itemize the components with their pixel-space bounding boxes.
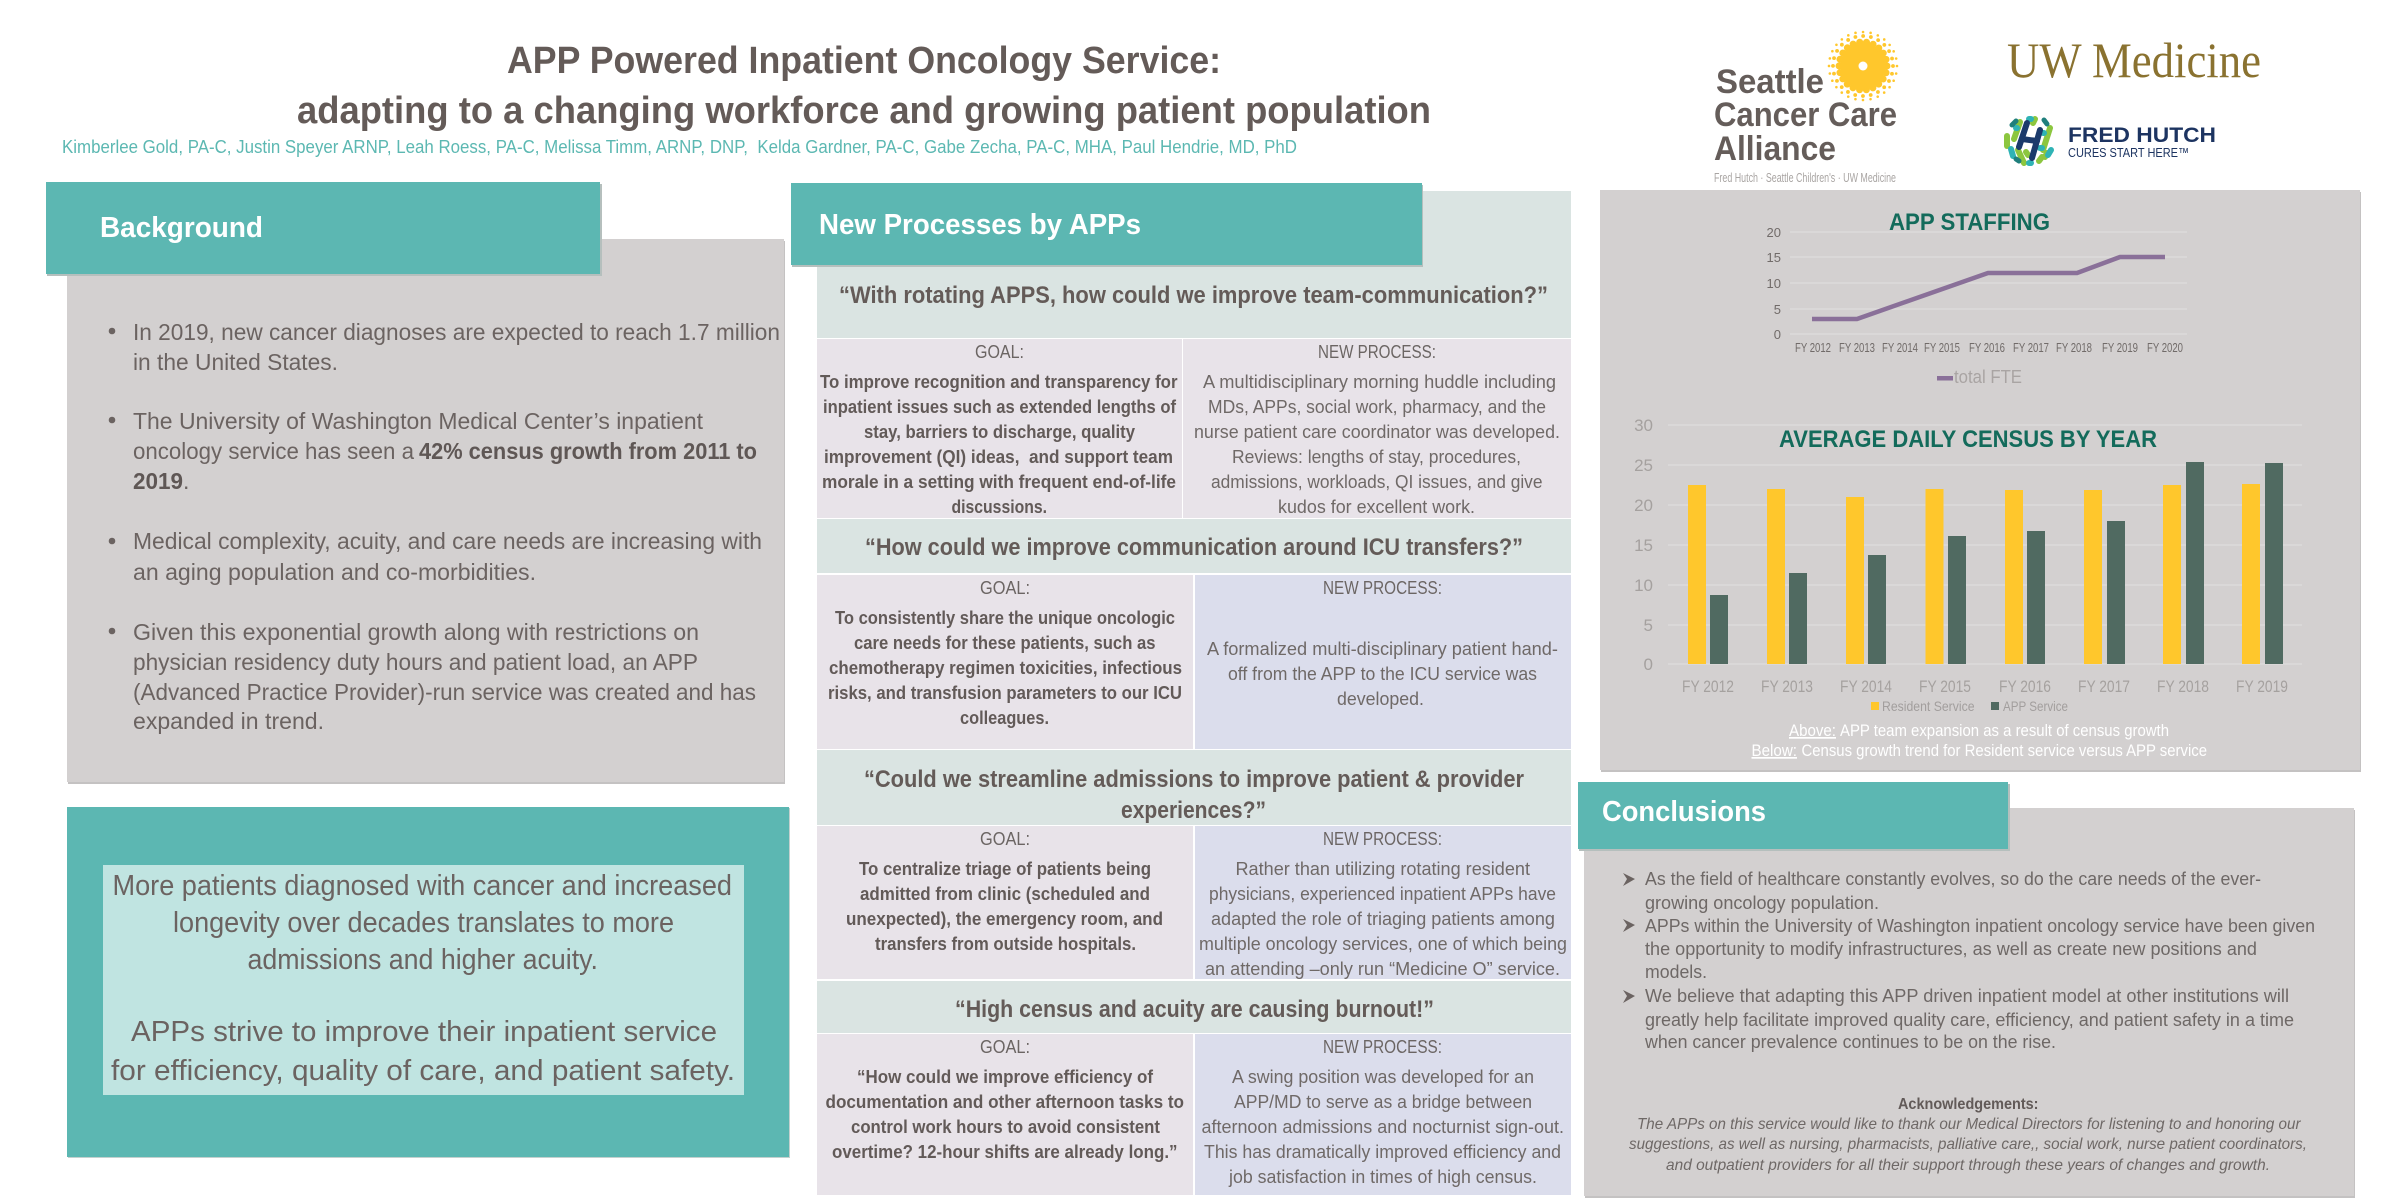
goal cell 2: care needs for these patients, such as [854,633,1156,653]
icon: sun [1829,32,1897,100]
x axis labels: FY 2019 [2236,677,2288,696]
title [297,40,1431,132]
goal cell 4: GOAL: [980,1037,1030,1057]
bullet list: background: Given this exponential growth along with restrictions on [133,619,699,645]
chart captions: Below: [1752,741,1797,760]
bullet arrows [1623,873,1635,1003]
process cell 3: NEW PROCESS: [1323,829,1442,849]
y axis labels: 5 [1644,616,1653,635]
y axis labels: 0 [1644,655,1653,674]
process cell 3: physicians, experienced inpatient APPs have [1209,883,1556,904]
y axis labels: 20 [1634,496,1653,515]
goal cell 2: risks, and transfusion parameters to our ICU [828,683,1182,703]
callout: key message: longevity over decades translates to more [173,907,674,939]
process cell 2: A formalized multi-disciplinary patient hand- [1207,638,1558,659]
y axis labels: 20 [1767,225,1781,240]
x axis labels: FY 2018 [2056,340,2092,355]
goal cell 4 [817,1034,1193,1195]
bullet list: background: 2019 [133,468,183,494]
bullet list: background: Medical complexity, acuity, and care needs are increasing with [133,528,762,554]
process cell 3: multiple oncology services, one of which being [1199,933,1567,954]
process cell 1: A multidisciplinary morning huddle including [1203,371,1556,392]
goal cell 4: overtime? 12-hour shifts are already long.” [832,1142,1178,1162]
process cell 1: Reviews: lengths of stay, procedures, [1232,446,1521,467]
chart captions: Census growth trend for Resident service versus APP service [1802,741,2207,760]
x axis labels: FY 2015 [1919,677,1971,696]
process cell 2 [1195,575,1571,749]
conclusions text: APPs within the University of Washington inpatient oncology service have been given [1645,915,2315,936]
bullet list: background: The University of Washington Medical Center’s inpatient [133,408,704,434]
legend: census: Resident Service [1882,698,1975,714]
data line: total FTE [1812,257,2165,319]
goal cell 4: documentation and other afternoon tasks to [826,1092,1184,1112]
x axis labels: FY 2016 [1969,340,2005,355]
process cell 1: MDs, APPs, social work, pharmacy, and the [1208,396,1546,417]
logo: Seattle Cancer Care Alliance: Alliance [1714,130,1836,168]
goal cell 1: improvement (QI) ideas, and support team [824,447,1173,467]
process cell 2: NEW PROCESS: [1323,578,1442,598]
question band 4 [817,981,1571,1033]
process cell 1 [1183,339,1571,518]
bullet list: background: oncology service has seen a [133,438,414,464]
process cell 1: admissions, workloads, QI issues, and give [1211,471,1542,492]
question band 3 [817,750,1571,825]
heading: new processes: New Processes by APPs [819,209,1141,241]
process cell 1: nurse patient care coordinator was developed. [1194,421,1560,442]
bullet list: background: an aging population and co-morbidities. [133,559,536,585]
y axis labels: 10 [1767,276,1781,291]
bullet list: background: . [183,468,189,494]
y axis labels: 15 [1634,536,1653,555]
goal cell 4: “How could we improve efficiency of [857,1067,1154,1087]
process cell 3 [1195,826,1571,979]
heading: background: Background [100,212,263,244]
acknowledgements: The APPs on this service would like to thank our Medical Directors for listening to and honoring our [1637,1116,2301,1133]
legend: total FTE: total FTE [1954,367,2022,387]
chart title: APP staffing: APP STAFFING [1889,209,2050,236]
panel: charts [1600,190,2361,772]
process cell 4: This has dramatically improved efficiency and [1204,1141,1561,1162]
x axis labels: FY 2019 [2102,340,2138,355]
heading: conclusions [1578,782,2010,851]
x axis labels: FY 2017 [2078,677,2130,696]
process cell 4: job satisfaction in times of high census. [1228,1166,1537,1187]
bullet list: background: 42% census growth from 2011 to [419,438,757,464]
legend: census [1871,698,2068,714]
APP service bars [1710,462,2283,664]
process cell 4: A swing position was developed for an [1232,1066,1534,1087]
process cell 4: afternoon admissions and nocturnist sign-out. [1202,1116,1564,1137]
chart captions: Above: [1789,721,1836,740]
goal cell 1: discussions. [952,497,1047,517]
acknowledgements: and outpatient providers for all their support through these years of changes and growth. [1666,1157,2270,1174]
goal cell 3: transfers from outside hospitals. [875,934,1136,954]
question band 2 [817,519,1571,573]
y axis labels: 15 [1767,250,1781,265]
legend: census: APP Service [2003,698,2068,714]
bullet list: background [109,319,780,734]
process cell 4: APP/MD to serve as a bridge between [1234,1091,1532,1112]
goal cell 2: GOAL: [980,578,1030,598]
process cell 3: an attending –only run “Medicine O” service. [1205,958,1560,979]
callout: key message: admissions and higher acuity. [248,944,598,976]
x axis labels: FY 2012 [1795,340,1831,355]
x axis labels: FY 2017 [2013,340,2049,355]
logo: Fred Hutch [2007,119,2216,163]
question band 3: experiences?” [1121,797,1266,824]
acknowledgements: suggestions, as well as nursing, pharmacists, palliative care,, social work, nurse patient coordinators, [1629,1136,2307,1153]
y axis labels: 0 [1774,327,1781,342]
bullet list: background: (Advanced Practice Provider)-run service was created and has [133,679,756,705]
conclusions text: We believe that adapting this APP driven inpatient model at other institutions will [1645,985,2289,1006]
question band 1: “With rotating APPS, how could we improve team-communication?” [839,282,1548,309]
goal cell 1: stay, barriers to discharge, quality [864,422,1135,442]
question band 2: “How could we improve communication around ICU transfers?” [865,534,1523,561]
goal cell 2: chemotherapy regimen toxicities, infectious [829,658,1182,678]
panel: new processes [791,183,1571,1195]
y axis labels: 25 [1634,456,1653,475]
callout: key message: APPs strive to improve their inpatient service [131,1016,717,1048]
process cell 4 [1195,1034,1571,1195]
conclusions text: models. [1645,961,1707,982]
panel: conclusions [1578,782,2355,1198]
process cell 2: off from the APP to the ICU service was [1228,663,1537,684]
logo: Seattle Cancer Care Alliance [1714,32,1897,185]
x axis labels: FY 2015 [1924,340,1960,355]
logo: Seattle Cancer Care Alliance: Cancer Care [1714,96,1897,134]
conclusions text [1644,868,2315,1052]
bullet list: background: expanded in trend. [133,708,324,734]
bar chart: average daily census [1634,416,2302,714]
acknowledgements: Acknowledgements: [1898,1096,2038,1113]
y axis labels [1634,416,1653,674]
x axis labels: FY 2012 [1682,677,1734,696]
question band 4: “High census and acuity are causing burnout!” [955,996,1434,1023]
goal cell 3: To centralize triage of patients being [859,859,1151,879]
process cell 3: adapted the role of triaging patients among [1211,908,1555,929]
process cell 4: NEW PROCESS: [1323,1037,1442,1057]
conclusions text: when cancer prevalence continues to be on the rise. [1644,1031,2056,1052]
heading: background [46,182,602,276]
y axis labels: 30 [1634,416,1653,435]
panel: background [46,182,785,784]
process cell 1: kudos for excellent work. [1278,496,1475,517]
x axis labels [1682,677,2288,696]
heading: conclusions: Conclusions [1602,796,1766,828]
goal cell 1: morale in a setting with frequent end-of-life [822,472,1176,492]
bullet list: background: in the United States. [133,349,338,375]
title: adapting to a changing workforce and growing patient population [297,90,1431,132]
process cell 3: Rather than utilizing rotating resident [1236,858,1530,879]
callout: key message [67,807,790,1158]
question band 1 [817,191,1571,338]
acknowledgements [1629,1096,2307,1174]
x axis labels: FY 2014 [1882,340,1918,355]
icon: Fred Hutch stripes [2007,119,2051,163]
goal cell 4: control work hours to avoid consistent [851,1117,1160,1137]
process cell 1: NEW PROCESS: [1318,342,1436,362]
goal cell 1: GOAL: [975,342,1024,362]
goal cell 1: To improve recognition and transparency for [820,372,1178,392]
conclusions text: the opportunity to modify infrastructures, as well as create new positions and [1645,938,2257,959]
logo: Seattle Cancer Care Alliance: Fred Hutch · Seattle Children's · UW Medicine [1714,170,1896,185]
authors: Kimberlee Gold, PA-C, Justin Speyer ARNP, Leah Roess, PA-C, Melissa Timm, ARNP, DNP, Kelda Gardner, PA-C, Gabe Zecha, PA-C, MHA, Paul Hendrie, MD, PhD [62,137,1297,157]
callout: key message: More patients diagnosed with cancer and increased [112,870,732,902]
chart title: census: AVERAGE DAILY CENSUS BY YEAR [1779,426,2157,453]
logo: UW Medicine: UW Medicine [2007,32,2261,88]
logo: Seattle Cancer Care Alliance: Seattle [1716,63,1824,101]
bullet list: background: In 2019, new cancer diagnoses are expected to reach 1.7 million [133,319,780,345]
logo: Fred Hutch: FRED HUTCH [2068,124,2216,147]
heading: new processes [791,183,1423,267]
y axis labels [1767,225,1781,342]
conclusions text: As the field of healthcare constantly evolves, so do the care needs of the ever- [1645,868,2261,889]
callout: key message: for efficiency, quality of care, and patient safety. [111,1055,735,1087]
logo: Fred Hutch: CURES START HERE™ [2068,145,2189,160]
x axis labels: FY 2018 [2157,677,2209,696]
conclusions text: greatly help facilitate improved quality care, efficiency, and patient safety in a time [1645,1009,2294,1030]
goal cell 3 [817,826,1193,979]
x axis labels: FY 2013 [1761,677,1813,696]
chart captions: APP team expansion as a result of census growth [1840,721,2169,740]
x axis labels: FY 2013 [1839,340,1875,355]
goal cell 3: unexpected), the emergency room, and [846,909,1163,929]
chart captions [1752,721,2207,760]
y axis labels: 5 [1774,302,1781,317]
goal cell 2: colleagues. [960,708,1049,728]
question band 3: “Could we streamline admissions to improve patient & provider [864,766,1524,793]
goal cell 2 [817,575,1193,749]
y axis labels: 10 [1634,576,1653,595]
line chart: APP staffing [1767,209,2187,387]
x axis labels: FY 2014 [1840,677,1892,696]
x axis labels [1795,340,2183,355]
goal cell 3: GOAL: [980,829,1030,849]
process cell 2: developed. [1337,688,1424,709]
bullet list: background: physician residency duty hours and patient load, an APP [133,649,698,675]
goal cell 2: To consistently share the unique oncologic [835,608,1175,628]
goal cell 3: admitted from clinic (scheduled and [860,884,1150,904]
x axis labels: FY 2020 [2147,340,2183,355]
goal cell 1: inpatient issues such as extended lengths of [823,397,1177,417]
goal cell 1 [817,339,1182,518]
x axis labels: FY 2016 [1999,677,2051,696]
conclusions text: growing oncology population. [1645,892,1879,913]
resident service bars [1688,484,2260,664]
title: APP Powered Inpatient Oncology Service: [507,40,1221,82]
